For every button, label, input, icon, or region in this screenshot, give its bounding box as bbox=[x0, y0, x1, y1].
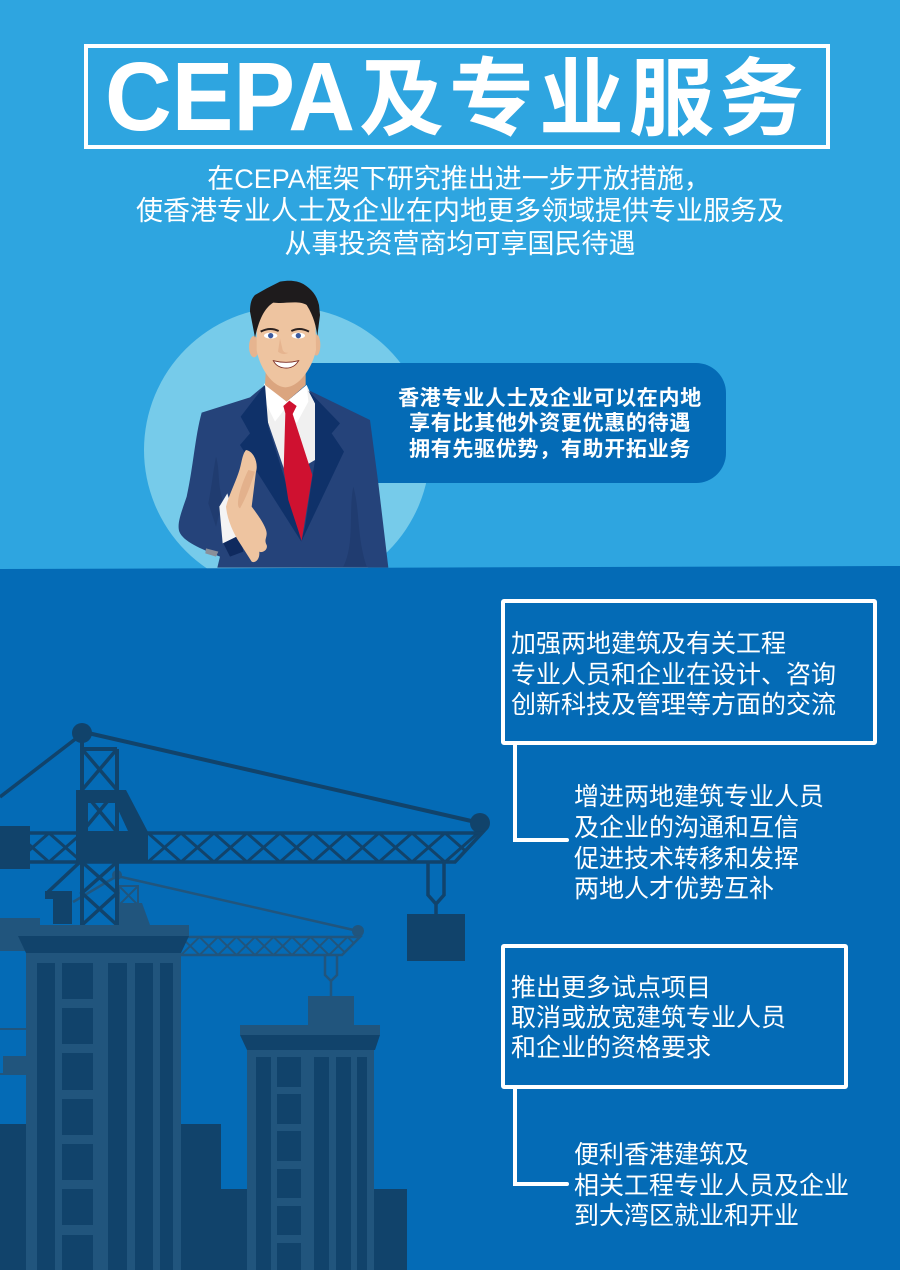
speech bubble: 拥有先驱优势，有助开拓业务 bbox=[409, 438, 691, 461]
cab bbox=[76, 790, 148, 863]
crane rear bbox=[73, 870, 364, 1032]
shirt bbox=[264, 383, 315, 477]
box 2: 和企业的资格要求 bbox=[511, 1034, 711, 1062]
speech bubble bbox=[300, 363, 726, 483]
lapels bbox=[240, 385, 301, 542]
text block 1 bbox=[574, 783, 824, 903]
eyes bbox=[264, 333, 277, 339]
ears bbox=[249, 336, 259, 357]
nose shadow bbox=[278, 338, 289, 354]
mast bbox=[82, 733, 117, 925]
text block 2 bbox=[574, 1141, 849, 1230]
businessman illustration bbox=[179, 281, 388, 568]
hand bbox=[226, 450, 267, 562]
box 1: 创新科技及管理等方面的交流 bbox=[511, 691, 836, 719]
mouth bbox=[273, 361, 299, 368]
text block 2: 到大湾区就业和开业 bbox=[574, 1202, 799, 1230]
upper background bbox=[0, 0, 900, 575]
intro text bbox=[136, 164, 784, 259]
box 2: 取消或放宽建筑专业人员 bbox=[511, 1004, 786, 1032]
speech bubble: 香港专业人士及企业可以在内地 bbox=[398, 386, 702, 410]
intro text: 使香港专业人士及企业在内地更多领域提供专业服务及 bbox=[136, 196, 784, 226]
title bbox=[86, 42, 828, 151]
text block 2: 相关工程专业人员及企业 bbox=[574, 1172, 849, 1200]
text block 1: 及企业的沟通和互信 bbox=[574, 814, 799, 842]
box 2: 推出更多试点项目 bbox=[511, 974, 711, 1002]
jacket bbox=[179, 385, 388, 568]
connector 1 bbox=[515, 743, 567, 840]
text block 1: 两地人才优势互补 bbox=[574, 875, 774, 903]
lower background bbox=[0, 566, 900, 1270]
intro text: 在CEPA框架下研究推出进一步开放措施， bbox=[207, 164, 711, 194]
title: 及专业服务 bbox=[359, 52, 809, 148]
connector 2 bbox=[515, 1087, 567, 1184]
text block 2: 便利香港建筑及 bbox=[574, 1141, 749, 1169]
hook bbox=[428, 862, 444, 914]
jib bbox=[30, 833, 148, 862]
box 1: 专业人员和企业在设计、咨询 bbox=[511, 661, 836, 689]
shirt cuff bbox=[219, 493, 240, 543]
tower left bbox=[0, 918, 189, 1270]
text block 1: 促进技术转移和发挥 bbox=[574, 845, 799, 873]
title: CEPA bbox=[105, 42, 355, 151]
strut and block bbox=[48, 862, 80, 892]
crane front bbox=[0, 723, 490, 961]
tie bbox=[283, 401, 312, 541]
box 1: 加强两地建筑及有关工程 bbox=[511, 630, 786, 658]
background skyline bbox=[0, 1124, 407, 1270]
speech bubble: 享有比其他外资更优惠的待遇 bbox=[409, 412, 691, 435]
box 2 bbox=[503, 946, 846, 1087]
text block 1: 增进两地建筑专业人员 bbox=[574, 783, 824, 811]
tower right bbox=[240, 1025, 380, 1270]
hair bbox=[250, 281, 320, 338]
box 1 bbox=[503, 601, 875, 743]
circle behind businessman bbox=[144, 307, 430, 593]
neck bbox=[265, 367, 306, 402]
face bbox=[257, 295, 316, 387]
intro text: 从事投资营商均可享国民待遇 bbox=[284, 229, 636, 259]
